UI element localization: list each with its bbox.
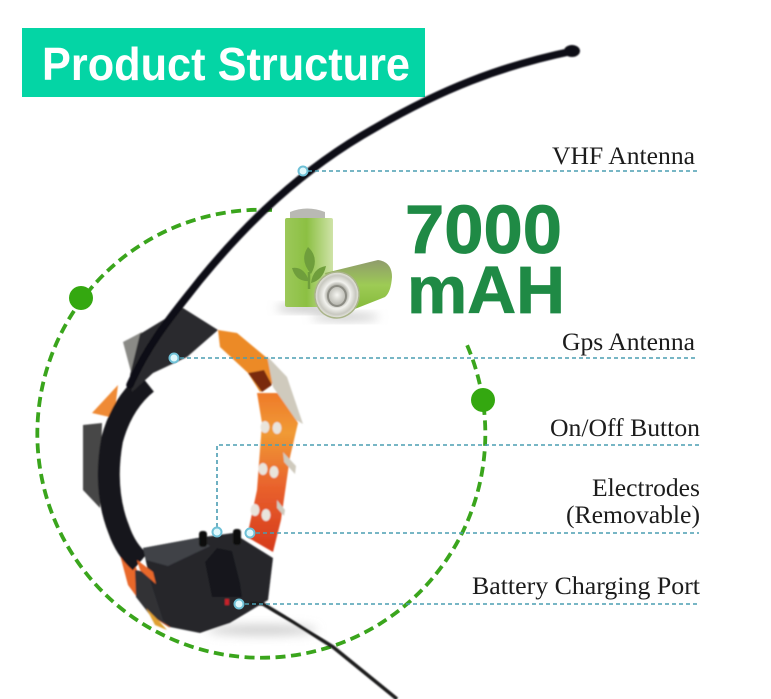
label: Electrodes (Removable): Electrodes [592, 473, 700, 502]
metal clip [267, 356, 303, 424]
side pouch [83, 423, 102, 508]
device clip [205, 548, 242, 597]
orange bit at device [137, 560, 156, 584]
device side block [135, 570, 170, 627]
label: VHF Antenna: VHF Antenna [552, 141, 695, 170]
green dashed orbit circle [37, 210, 485, 658]
capacity text: 7000 [405, 191, 562, 268]
label: Electrodes (Removable): (Removable) [566, 500, 700, 529]
upper right strap [218, 330, 273, 392]
label: On/Off Button: On/Off Button [550, 413, 700, 442]
label: Gps Antenna [170, 327, 698, 362]
strap buckle [248, 370, 272, 392]
icon: batteries [276, 208, 392, 323]
orbit dot right [471, 388, 495, 412]
vhf antenna [130, 51, 573, 385]
label: Electrodes (Removable) [246, 473, 700, 538]
label: VHF Antenna [298, 141, 698, 176]
label: Battery Charging Port [234, 571, 700, 608]
strap holes [250, 421, 282, 521]
lower strap [247, 393, 298, 552]
label: On/Off Button [212, 413, 700, 536]
capacity text [405, 191, 565, 328]
antenna tip [564, 45, 580, 57]
ground shadow [207, 625, 317, 635]
small clips [277, 452, 296, 516]
lower left strap [108, 510, 170, 628]
charging cable [250, 603, 397, 699]
label: Battery Charging Port: Battery Charging Port [472, 571, 700, 600]
black strap [109, 383, 147, 562]
gps block grey flap [123, 332, 143, 372]
gps block [130, 308, 218, 392]
red led [225, 599, 229, 605]
label: Gps Antenna: Gps Antenna [562, 327, 695, 356]
electrodes [199, 529, 241, 547]
capacity text: mAH [407, 253, 565, 328]
device top face [143, 538, 210, 566]
left orange strap pieces [92, 385, 118, 418]
device body [143, 533, 273, 633]
collar product photo [83, 45, 580, 699]
title banner: Product Structure [42, 38, 410, 90]
orbit dot left [69, 286, 93, 310]
yellow strap end [146, 608, 167, 630]
